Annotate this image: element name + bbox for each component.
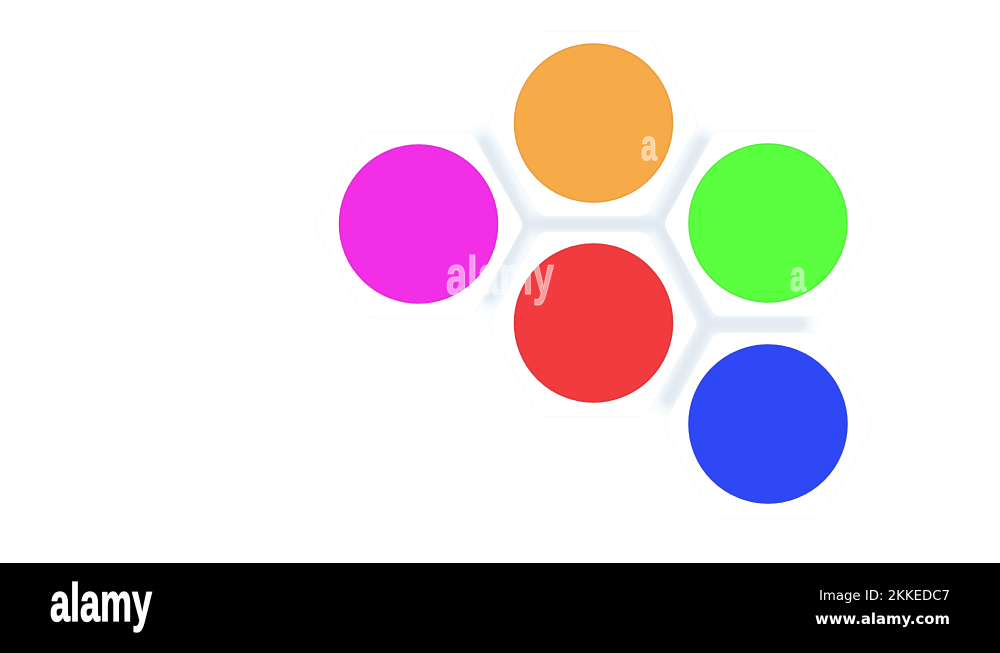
magenta circle: [340, 145, 498, 303]
image id: Image ID: 2KKEDC7: [819, 589, 950, 604]
blue circle: [689, 345, 847, 503]
watermark: a on green: a: [790, 252, 806, 301]
hexagon gutter shadows: [484, 142, 800, 400]
website: www.alamy.com: [815, 610, 950, 628]
hexagon panels: [328, 44, 859, 505]
footer logo: alamy: [50, 573, 152, 633]
footer bar: [0, 563, 1000, 653]
watermark: alamy: alamy: [446, 246, 554, 306]
red circle: [514, 244, 672, 402]
green circle: [689, 144, 847, 302]
watermark: a on orange: a: [641, 121, 657, 170]
orange circle: [514, 44, 672, 202]
